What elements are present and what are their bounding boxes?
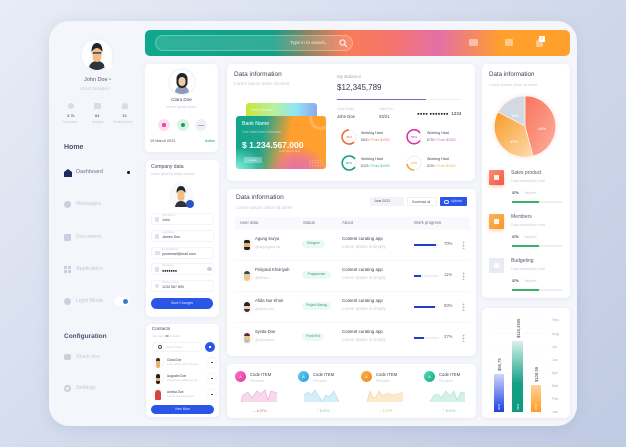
subtitle: Lorem ipsum dolor sit amet [234, 81, 289, 86]
metric: budgeting: 37% [512, 279, 519, 283]
stat: working hard green: $425 / From $1000 [361, 164, 390, 168]
item: pink: Code ITEM [250, 372, 271, 377]
balance amount: $12,345,789 [337, 83, 382, 92]
contact: Clara Doe: Lorem ipsum dolor sit amet [167, 363, 198, 366]
nav: Stack dev: Stack dev [76, 354, 100, 360]
table header: User data [240, 220, 258, 225]
card: Data information with balance [227, 64, 475, 181]
bank card: Lorem [249, 158, 257, 162]
metric: sales product [488, 170, 562, 203]
row: Fitriyatul Khoiriyah: 11% [444, 272, 452, 277]
row: Afida Nur Khoir: Lorem Ipsum is simply [342, 306, 386, 311]
field: phone: Phone number [162, 281, 179, 284]
stat: working hard yellow: 20% [411, 161, 417, 165]
heading: Contacts [152, 326, 170, 331]
subtitle: Lorem ipsum dolor sit amet [489, 82, 537, 87]
download button: Download all [412, 200, 430, 204]
valid thru: 03/21 [379, 114, 389, 118]
profile role: UI/UX Designer [80, 86, 109, 91]
stat: working hard pink [406, 129, 456, 144]
row: Agung Surya [235, 232, 470, 261]
item: blue: ⌃ 6.37% [316, 409, 329, 413]
subtitle: lorem ipsum dolor [166, 105, 197, 109]
row: Afida Nur Khoir: Afida Nur Khoir [255, 298, 283, 303]
profile stats: 3.7k [67, 113, 75, 118]
heading: Data information [236, 194, 284, 201]
card: bar chart [482, 308, 570, 418]
dashboard panel [49, 21, 577, 426]
item: orange [361, 371, 403, 413]
search box: Type in to search... [290, 40, 329, 45]
subtitle: Lorem Ipsum dolor sit amet [236, 205, 292, 210]
item: green: Code ITEM [439, 372, 460, 377]
row: Fitriyatul Khoiriyah: Fitriyatul Khoiriyah [255, 267, 289, 272]
card holder: John Doe [337, 114, 355, 118]
field: email: youremail@mail.com [162, 252, 196, 256]
metric: budgeting [489, 258, 562, 291]
stat: working hard yellow [406, 156, 456, 171]
stat: working hard pink: $750 / From $1500 [427, 138, 456, 142]
card: user table [227, 189, 476, 356]
bar chart [494, 318, 559, 414]
nav: Dashboard [64, 169, 130, 177]
row: Agung Surya: 70% [444, 241, 452, 246]
field: last name: James Doe [162, 235, 180, 239]
nav: Stack dev [64, 354, 100, 360]
item: orange: Code ITEM [376, 372, 397, 377]
metric: sales product: Data description here [511, 179, 545, 183]
card: pie chart and metrics [482, 64, 570, 298]
row: Fitriyatul Khoiriyah: Lorem Ipsum is simply [342, 275, 386, 280]
table header: About [342, 220, 353, 225]
profile stats: Followers [62, 120, 77, 124]
upload button: Upload [451, 199, 462, 203]
pie chart: 48% [538, 126, 546, 131]
stat: working hard orange: Working Hard [361, 131, 383, 135]
bar chart: $108,59 [534, 366, 539, 382]
field: email: Email address [162, 248, 178, 251]
card holder: Card Holder [337, 107, 354, 111]
button: save changes [151, 298, 213, 309]
date: 19 March 2023 [150, 139, 175, 143]
back bank card [246, 103, 317, 123]
nav: Light Mode [64, 297, 129, 306]
bar chart: Feb [552, 397, 559, 401]
subtitle: Lorem Ipsum is simply dummy [151, 172, 194, 176]
button: view more: View More [175, 407, 190, 411]
bar chart: Jun [552, 358, 558, 362]
card: Contacts [146, 324, 219, 417]
avatar [175, 186, 194, 208]
profile stats: Images [92, 120, 104, 124]
bar chart: $56,75 [497, 358, 502, 371]
bar chart: Jul [552, 345, 557, 349]
table header: Work progress [414, 220, 441, 225]
search input: Search here... [166, 345, 185, 349]
nav: Messages [64, 201, 101, 208]
row: Syvita Doe: Content curating app [342, 329, 383, 334]
bar chart: Aug [552, 332, 559, 336]
field: phone: 1234 567 890 [162, 285, 184, 289]
item: green: ⌃ 6.37% [442, 409, 455, 413]
row: Syvita Doe: Syvita Doe [255, 329, 275, 334]
bar chart: 27% [534, 404, 538, 410]
bank card: Bank Name [242, 121, 269, 127]
row: Agung Surya: Agung Surya [255, 236, 279, 241]
contact: Augustin Doe [156, 374, 216, 384]
metric: members [487, 214, 562, 247]
download button [407, 197, 437, 206]
stat: working hard orange [341, 129, 390, 145]
balance progress [337, 98, 461, 100]
stat: working hard yellow: $250 / From $1000 [427, 164, 456, 168]
item: pink: ⌄ 6.37% [253, 409, 266, 413]
field: password: ●●●●●●● [162, 268, 177, 273]
metric: members: 37% [512, 235, 519, 239]
item: pink: Put name [250, 379, 264, 383]
metric: sales product: 37% [512, 191, 519, 195]
row: Agung Surya: @agungsurya [255, 244, 280, 249]
bar chart: $115,4506 [516, 318, 521, 338]
stat: working hard green [341, 155, 390, 171]
nav: Settings: Settings [76, 385, 96, 391]
item: pink: A [239, 374, 242, 378]
row: Syvita Doe: Front End [306, 334, 320, 338]
row: Syvita Doe: @syvitaaa [255, 337, 274, 342]
action buttons [158, 119, 170, 131]
nav: Settings [64, 385, 96, 392]
search input [152, 342, 202, 352]
metric: sales product: Sales product [511, 170, 542, 176]
field: first name: First Name [162, 214, 175, 217]
stat: working hard yellow: Working Hard [427, 157, 449, 161]
row: Syvita Doe: 27% [444, 334, 452, 339]
valid thru: Valid Thru [379, 107, 393, 111]
row: Agung Surya: Designer [307, 241, 320, 245]
profile stats [62, 103, 133, 124]
pie chart: 45% [510, 139, 518, 144]
metric: sales product: Targeted [524, 191, 536, 195]
sidebar [62, 40, 133, 392]
row: Afida Nur Khoir: Project Manag [306, 303, 327, 307]
bank card: Your wallet data information [242, 130, 281, 134]
item: blue: Code ITEM [313, 372, 334, 377]
item: green: Put name [439, 379, 453, 383]
balance label: My Balance [337, 74, 361, 79]
bar chart: Jan [552, 410, 558, 414]
card holder [337, 107, 355, 118]
row: Syvita Doe: Lorem Ipsum is simply [342, 337, 386, 342]
card number: ●●●● ●●●●●●● 1234 [417, 111, 461, 116]
table header [235, 217, 470, 230]
bar chart: Apr [552, 371, 559, 375]
profile name: John Doe • [84, 77, 111, 83]
heading: Data information [489, 71, 534, 78]
field: email [151, 247, 214, 259]
field: last name: Last Name [162, 231, 175, 234]
field: password: Password [162, 264, 173, 267]
contact: Clara Doe [156, 358, 216, 368]
button: view more [151, 405, 214, 414]
row: Fitriyatul Khoiriyah: Content curating app [342, 267, 383, 272]
header icons [469, 39, 478, 46]
field: phone [151, 280, 214, 292]
profile stats: 64 [95, 113, 99, 118]
metric: members: Targeted [524, 235, 536, 239]
back bank card: Bank Name [251, 107, 272, 112]
row: Agung Surya: Lorem Ipsum is simply [342, 244, 386, 249]
item: blue [298, 371, 340, 413]
heading: Data information [234, 71, 282, 78]
bank card [236, 116, 326, 169]
metric: budgeting: Budgeting [511, 258, 534, 264]
row: Syvita Doe [244, 329, 464, 343]
pie chart [492, 94, 558, 159]
bar chart: Sep [552, 318, 559, 322]
header bar: 7 [541, 36, 543, 41]
stat: working hard orange: $800 / From $1000 [361, 138, 390, 142]
row: Afida Nur Khoir: @afida.nur [255, 306, 275, 311]
avatar: Clara [168, 68, 196, 96]
stat: working hard green: 80% [346, 161, 352, 165]
profile stats: 13 [122, 113, 126, 118]
metric: members: Members [511, 214, 532, 220]
metric: members: Data description here [511, 223, 545, 227]
item: green [424, 371, 465, 413]
metric: budgeting: Data description here [511, 267, 545, 271]
upload button [440, 197, 467, 206]
nav: Document [64, 234, 101, 241]
valid thru [379, 107, 393, 118]
nav: Light Mode: Light Mode [76, 298, 103, 304]
row: Afida Nur Khoir: Content curating app [342, 298, 383, 303]
row: Agung Surya: Content curating app [342, 236, 383, 241]
bar chart: Mar [552, 384, 559, 388]
row: Afida Nur Khoir [235, 294, 470, 323]
metric: budgeting: Targeted [524, 279, 536, 283]
status: Active [205, 139, 215, 143]
stat: working hard orange: 30% [346, 135, 352, 139]
card: Clara Doe profile [145, 64, 218, 152]
row: Fitriyatul Khoiriyah: @fitriya [255, 275, 269, 280]
item: orange: Put name [376, 379, 390, 383]
bank card: $ 1.234.567.000 [242, 140, 303, 150]
row: Afida Nur Khoir: 83% [444, 303, 452, 308]
nav: Application: Application [76, 266, 103, 272]
pie chart: 16% [511, 113, 519, 118]
field: password [151, 263, 214, 275]
contact: Annisa Doe: Annisa Doe [167, 390, 183, 394]
card: Company data form [146, 160, 219, 317]
stat: working hard green: Working Hard [361, 157, 383, 161]
nav: Messages: Messages [76, 201, 101, 207]
bar chart: 60% [497, 404, 501, 410]
row: Fitriyatul Khoiriyah [235, 263, 470, 292]
contact: Augustin Doe: Augustin Doe [167, 374, 186, 378]
row: Fitriyatul Khoiriyah: Programmer [308, 272, 325, 276]
heading: Home: Home [64, 144, 83, 151]
nav: Dashboard: Dashboard [76, 169, 103, 175]
card: code items [227, 364, 476, 418]
date dropdown: June 2023 [374, 199, 390, 203]
contact: Augustin Doe: Consectetur adipiscing elit [167, 379, 197, 382]
bar chart: 70% [516, 404, 520, 410]
item: orange: A [365, 374, 368, 378]
bank card: Lorem Ipsum here [279, 150, 300, 153]
item: pink [235, 371, 277, 413]
contact: Annisa Doe [155, 390, 216, 400]
field: first name: John [162, 218, 170, 222]
nav: Document: Document [76, 234, 101, 240]
profile avatar [82, 40, 112, 70]
profile stats: Notifications [113, 120, 133, 124]
table header: Status [303, 220, 315, 225]
contact: Annisa Doe: Sed do eiusmod tempor [167, 395, 195, 398]
item: blue: A [302, 374, 305, 378]
item: green: A [428, 374, 431, 378]
subtitle: You have 10 contacts [152, 334, 181, 338]
stat: working hard pink: Working Hard [427, 131, 449, 135]
header bar [145, 30, 570, 56]
add button [205, 342, 215, 352]
field: first name [151, 213, 214, 225]
heading: Configuration: Configuration [64, 333, 107, 340]
item: orange: ⌄ 6.37% [379, 409, 392, 413]
date dropdown [370, 197, 404, 206]
item: blue: Put name [313, 379, 327, 383]
search box [155, 35, 353, 51]
field: last name [151, 230, 214, 242]
button: save changes: Save Changes [171, 301, 193, 305]
heading: Company data [151, 164, 184, 170]
stat: working hard pink: 56% [411, 135, 417, 139]
name: Clara Doe [171, 97, 192, 102]
contact: Clara Doe: Clara Doe [167, 358, 181, 362]
